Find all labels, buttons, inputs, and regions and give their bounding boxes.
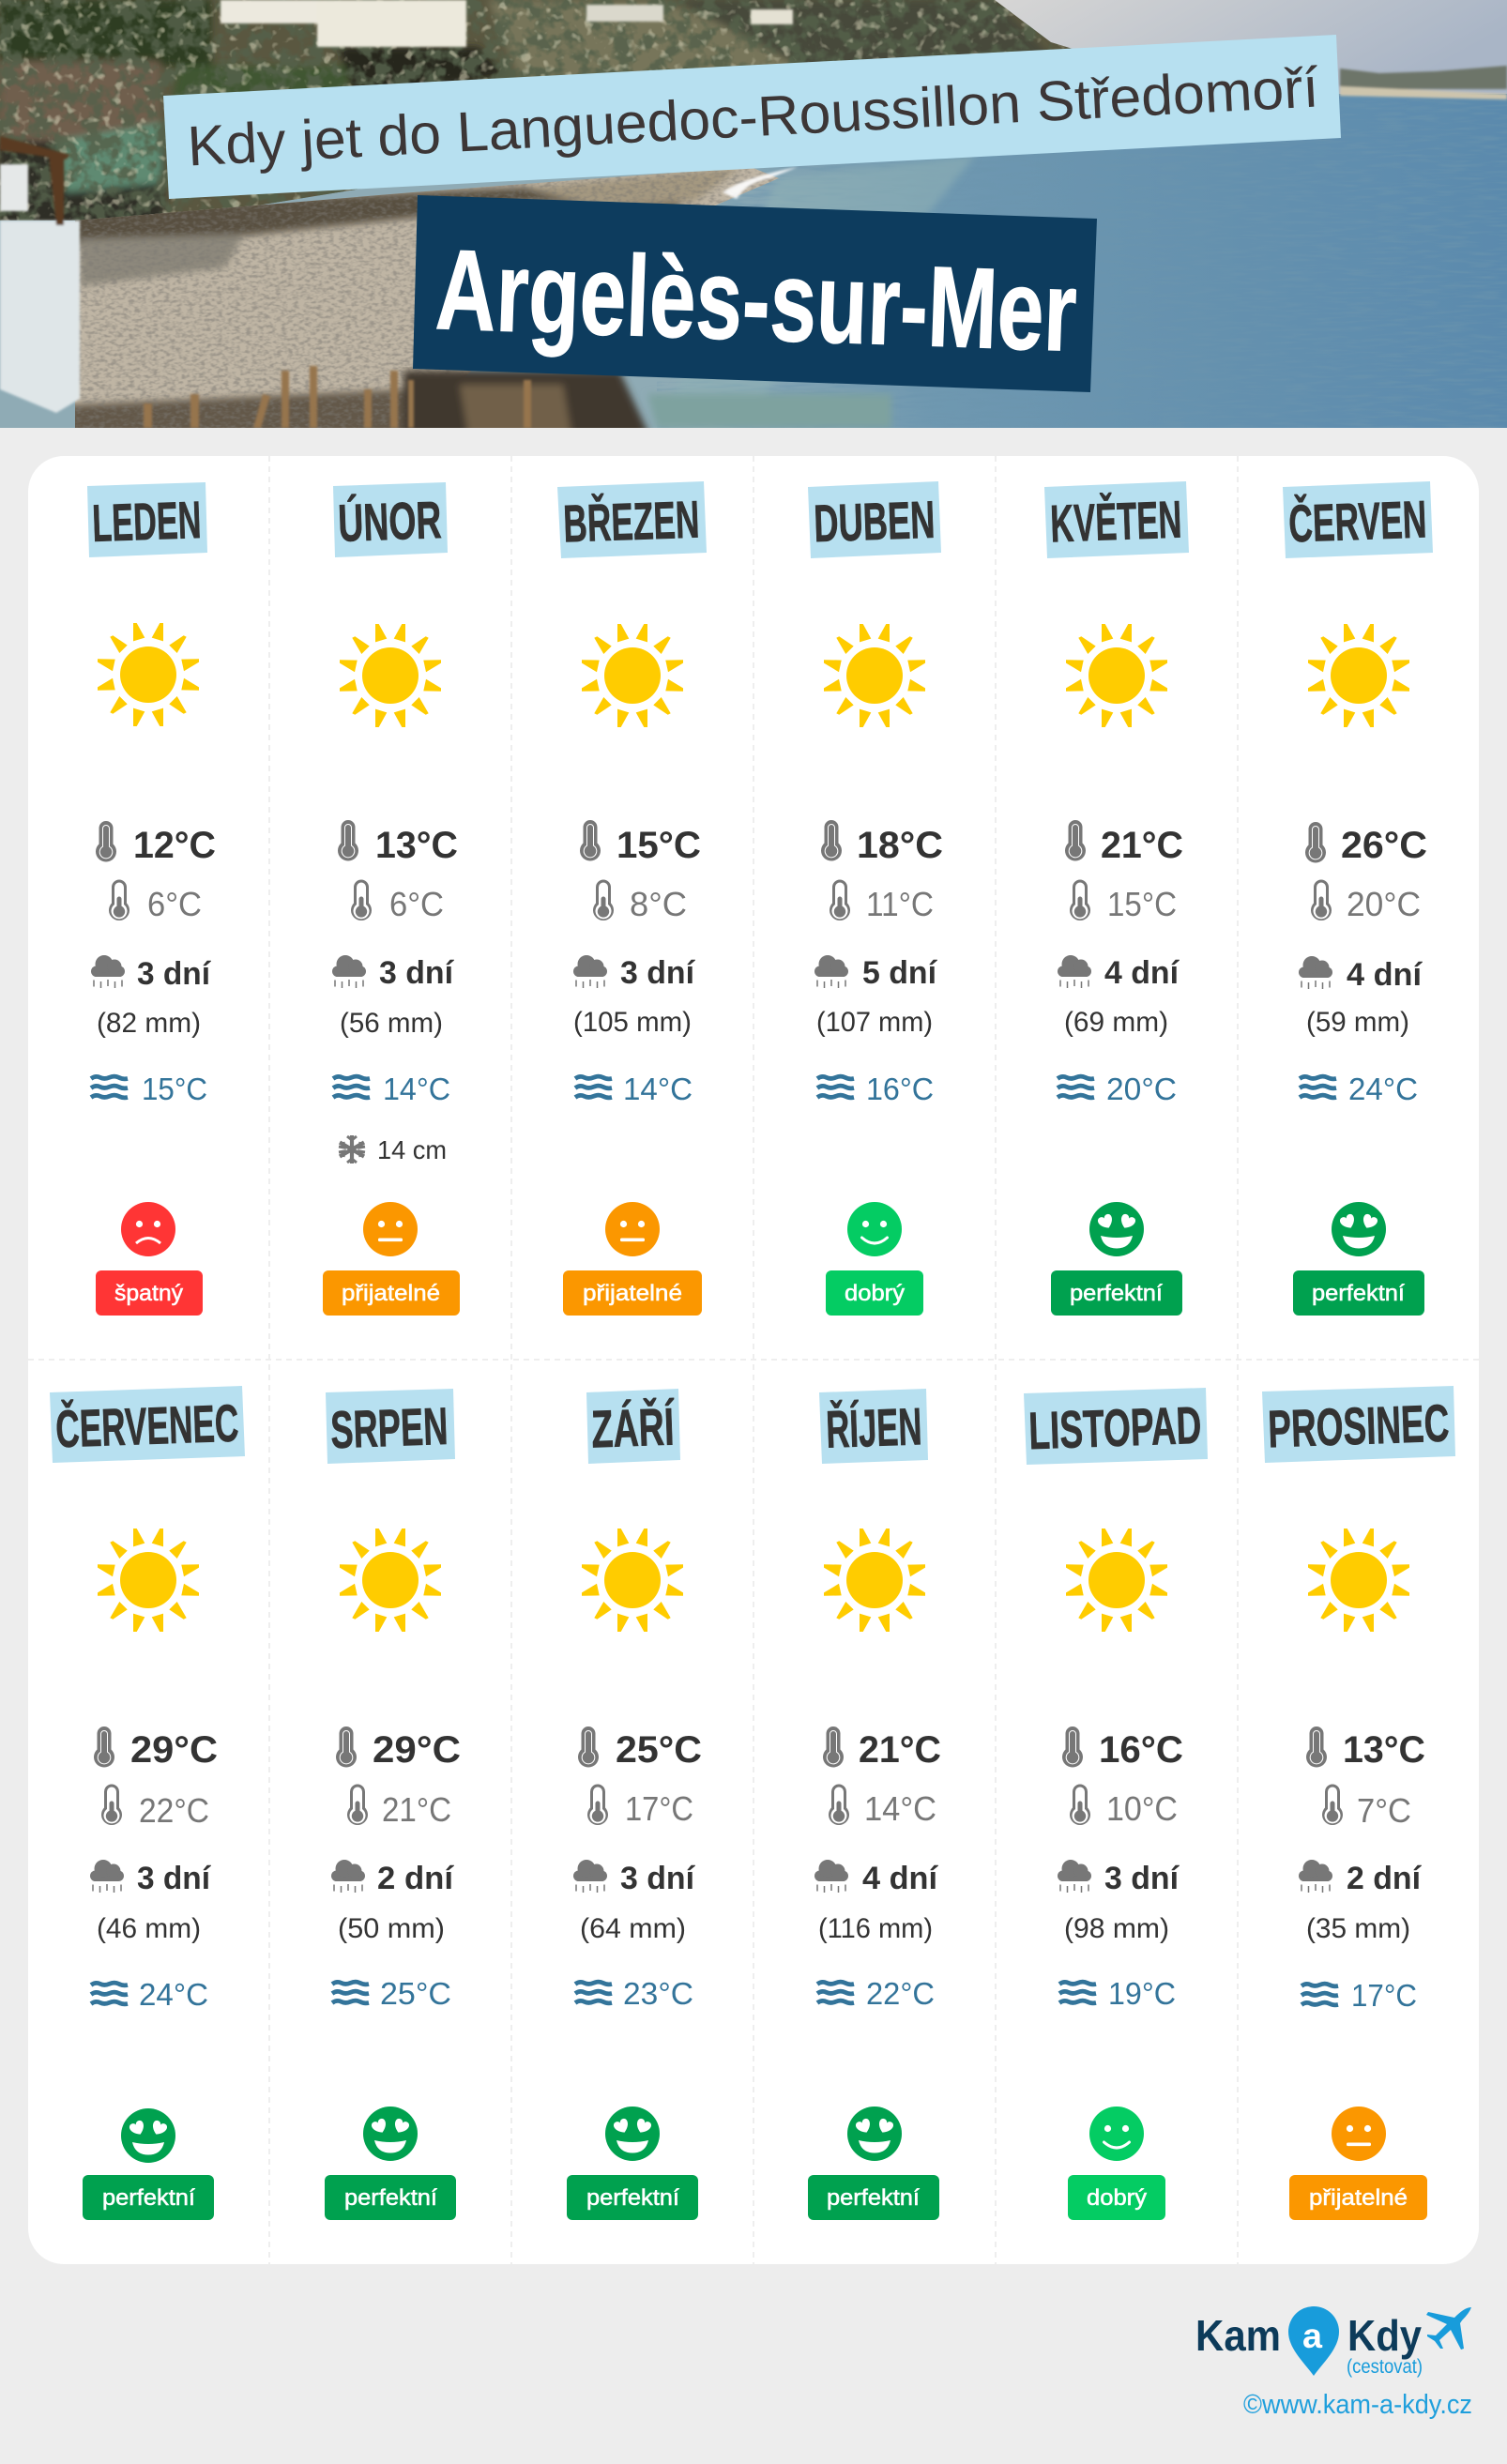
min temperature <box>1070 1785 1178 1828</box>
rain days: 3 dní <box>137 956 212 992</box>
title banner: town name <box>413 195 1097 392</box>
rating: good: dobrý <box>1087 2185 1147 2211</box>
rating: perfect: perfektní <box>1312 1281 1405 1306</box>
month: November <box>1024 1388 1208 2220</box>
max temperature: 29°C <box>373 1729 461 1771</box>
rain days <box>332 955 455 991</box>
min temperature: 7°C <box>1357 1791 1411 1830</box>
max temperature: 21°C <box>1101 825 1183 866</box>
month: June <box>1283 481 1433 1316</box>
precipitation: (50 mm) <box>338 1913 445 1944</box>
icon: sun <box>582 624 683 727</box>
max temperature <box>94 1726 218 1771</box>
website credit: ©www.kam-a-kdy.cz <box>1243 2390 1472 2420</box>
month label: LISTOPAD <box>1024 1388 1208 1465</box>
max temperature: 25°C <box>616 1729 702 1771</box>
month: March <box>557 481 707 1316</box>
max temperature: 26°C <box>1341 825 1427 866</box>
title banner: region: Kdy jet do Languedoc-Roussillon Středomoří <box>186 55 1320 178</box>
month: July <box>50 1386 245 2220</box>
rating: perfect: perfektní <box>586 2185 679 2211</box>
sea temperature <box>575 1976 693 2011</box>
rain days: 3 dní <box>379 955 455 991</box>
month label: ZÁŘÍ: ZÁŘÍ <box>590 1396 676 1459</box>
min temperature: 20°C <box>1347 885 1421 923</box>
min temperature: 21°C <box>382 1790 451 1829</box>
precipitation: (98 mm) <box>1064 1913 1169 1944</box>
sea temperature: 19°C <box>1108 1976 1176 2011</box>
sea temperature <box>91 1072 207 1106</box>
month: May <box>1044 481 1189 1316</box>
month: October <box>808 1389 941 2220</box>
rating: perfect: perfektní <box>1070 1281 1163 1306</box>
rating: perfect <box>1293 1202 1424 1316</box>
sea temperature <box>333 1072 450 1106</box>
brand logo: Kam a Kdy: Kam <box>1195 2311 1281 2360</box>
month label: BŘEZEN: BŘEZEN <box>562 490 700 554</box>
sea temperature: 16°C <box>866 1072 934 1106</box>
sea temperature <box>91 1977 208 2012</box>
icon: location pin: a <box>1302 2317 1322 2355</box>
rating: perfect: perfektní <box>102 2185 195 2211</box>
rating: perfect <box>1051 1202 1182 1316</box>
rain days: 3 dní <box>1104 1861 1180 1896</box>
rain days <box>1299 956 1423 993</box>
sea temperature: 17°C <box>1351 1978 1417 2013</box>
month label: ÚNOR <box>333 482 448 557</box>
rain days: 5 dní <box>862 955 938 991</box>
max temperature <box>96 821 216 866</box>
snow depth <box>339 1135 447 1164</box>
icon: sun <box>824 1529 925 1632</box>
min temperature: 17°C <box>625 1789 693 1828</box>
month label: ŘÍJEN: ŘÍJEN <box>825 1396 922 1459</box>
hillside <box>0 0 1126 225</box>
icon: sun <box>582 1529 683 1632</box>
month: January <box>87 482 216 1316</box>
brand logo: Kam a Kdy: (cestovat) <box>1347 2356 1423 2378</box>
icon: sun <box>340 1529 441 1632</box>
sea temperature <box>1058 1072 1177 1106</box>
sea temperature <box>817 1976 935 2011</box>
icon: snowflake <box>339 1135 365 1164</box>
snow depth: 14 cm <box>377 1135 447 1164</box>
min temperature <box>593 880 687 923</box>
month label: ČERVEN: ČERVEN <box>1287 489 1427 554</box>
max temperature: 21°C <box>859 1729 941 1771</box>
month label: KVĚTEN <box>1044 481 1189 558</box>
rating: good <box>826 1202 923 1316</box>
precipitation: (69 mm) <box>1064 1007 1168 1038</box>
min temperature: 6°C <box>389 885 444 923</box>
precipitation: (105 mm) <box>573 1007 692 1038</box>
rating: acceptable: přijatelné <box>342 1281 440 1306</box>
month label: LISTOPAD: LISTOPAD <box>1028 1395 1202 1460</box>
sea temperature: 24°C <box>1348 1072 1418 1106</box>
month: April <box>808 481 943 1316</box>
min temperature: 22°C <box>139 1791 209 1830</box>
rating: acceptable: přijatelné <box>1309 2185 1408 2211</box>
title banner: town name: Argelès-sur-Mer <box>434 225 1079 375</box>
rain days: 2 dní <box>377 1861 455 1896</box>
rating: bad: špatný <box>114 1281 183 1306</box>
max temperature: 18°C <box>857 825 943 866</box>
max temperature <box>821 820 943 866</box>
month label: ČERVENEC <box>50 1386 245 1463</box>
precipitation: (56 mm) <box>340 1008 443 1039</box>
sea temperature: 20°C <box>1106 1072 1177 1106</box>
sea temperature <box>817 1072 934 1106</box>
sea temperature <box>575 1072 693 1106</box>
rating: bad <box>96 1202 203 1316</box>
precipitation: (116 mm) <box>818 1913 933 1944</box>
brand logo: Kam a Kdy <box>1195 2306 1471 2378</box>
sea temperature: 22°C <box>866 1976 935 2011</box>
sea temperature: 15°C <box>142 1072 207 1106</box>
rain days: 4 dní <box>862 1861 939 1896</box>
rain days <box>1299 1860 1423 1896</box>
month label: ČERVENEC: ČERVENEC <box>54 1393 239 1458</box>
max temperature: 15°C <box>616 825 701 866</box>
precipitation: (64 mm) <box>580 1913 686 1944</box>
rain days: 4 dní <box>1347 957 1423 993</box>
rating: perfect <box>325 2107 456 2220</box>
month label: SRPEN: SRPEN <box>329 1396 449 1459</box>
month label: ZÁŘÍ <box>586 1389 680 1464</box>
precipitation: (107 mm) <box>816 1007 933 1038</box>
month label: ČERVEN <box>1283 481 1433 558</box>
precipitation: (82 mm) <box>97 1008 201 1039</box>
sea temperature <box>1300 1072 1418 1106</box>
month label: SRPEN <box>326 1389 455 1464</box>
max temperature <box>1065 820 1183 866</box>
rain days <box>573 955 696 991</box>
month: September <box>567 1389 702 2220</box>
max temperature <box>338 820 458 866</box>
sea temperature <box>1059 1976 1176 2011</box>
month label: LEDEN: LEDEN <box>91 490 202 553</box>
icon: sun <box>1066 624 1167 727</box>
sea temperature <box>1302 1978 1417 2013</box>
rain days: 3 dní <box>620 1861 696 1896</box>
month label: ÚNOR: ÚNOR <box>337 490 442 553</box>
rating: good <box>1068 2107 1165 2220</box>
icon: sun <box>1066 1529 1167 1632</box>
max temperature: 12°C <box>133 825 216 866</box>
max temperature <box>580 820 701 866</box>
icon: sun <box>98 623 199 726</box>
sea temperature: 14°C <box>623 1072 693 1106</box>
max temperature: 13°C <box>1343 1729 1425 1771</box>
rain days <box>1058 1860 1180 1896</box>
rain days <box>814 1860 939 1896</box>
beach <box>75 169 779 428</box>
rating: perfect: perfektní <box>344 2185 437 2211</box>
rating: acceptable <box>1289 2107 1427 2220</box>
rating: perfect <box>808 2107 939 2220</box>
month label: BŘEZEN <box>557 481 707 558</box>
min temperature <box>347 1785 451 1829</box>
rain days: 2 dní <box>1347 1861 1423 1896</box>
min temperature <box>109 880 202 923</box>
icon: sun <box>1308 1529 1409 1632</box>
month: February <box>323 482 460 1316</box>
month label: LEDEN <box>87 482 207 557</box>
max temperature <box>1306 1726 1425 1771</box>
sea temperature <box>332 1976 451 2011</box>
month label: ŘÍJEN <box>819 1389 928 1464</box>
icon: location pin <box>1288 2306 1339 2376</box>
max temperature <box>1305 822 1427 866</box>
rain days: 4 dní <box>1104 955 1180 991</box>
icon: sun <box>98 1529 199 1632</box>
sea temperature: 25°C <box>380 1976 451 2011</box>
rating: perfect <box>83 2108 214 2220</box>
weather card panel <box>28 456 1479 2264</box>
min temperature <box>1311 880 1421 923</box>
rain days <box>814 955 938 991</box>
month label: KVĚTEN: KVĚTEN <box>1049 490 1182 553</box>
min temperature <box>587 1785 693 1828</box>
sea temperature: 24°C <box>139 1977 208 2012</box>
rain days <box>1058 955 1180 991</box>
rain days: 3 dní <box>620 955 696 991</box>
min temperature: 15°C <box>1107 885 1177 923</box>
max temperature: 13°C <box>375 825 458 866</box>
rating: acceptable <box>323 1202 460 1316</box>
rating: acceptable: přijatelné <box>583 1281 682 1306</box>
sea temperature: 23°C <box>623 1976 693 2011</box>
max temperature <box>578 1726 702 1771</box>
min temperature <box>830 880 934 923</box>
precipitation: (59 mm) <box>1306 1007 1409 1038</box>
min temperature <box>829 1785 936 1828</box>
min temperature: 10°C <box>1106 1789 1178 1828</box>
icon: sun <box>1308 624 1409 727</box>
rating: good: dobrý <box>845 1281 905 1306</box>
min temperature <box>1070 880 1177 923</box>
sea temperature: 14°C <box>383 1072 450 1106</box>
icon: sun <box>340 624 441 727</box>
rain days: 3 dní <box>137 1861 212 1896</box>
rating: acceptable <box>563 1202 702 1316</box>
min temperature: 11°C <box>866 885 934 923</box>
min temperature <box>1322 1785 1411 1830</box>
month label: DUBEN <box>808 481 941 558</box>
month: August <box>325 1389 461 2220</box>
rating: perfect: perfektní <box>827 2185 920 2211</box>
month: December <box>1262 1386 1455 2220</box>
rain days <box>90 1860 212 1896</box>
rain days <box>91 955 212 992</box>
rain days <box>573 1860 696 1896</box>
hero photo: beach and sea <box>0 0 1507 441</box>
month label: DUBEN: DUBEN <box>813 490 936 553</box>
max temperature <box>336 1726 461 1771</box>
rating: perfect <box>567 2107 698 2220</box>
rain days <box>331 1860 455 1896</box>
min temperature: 14°C <box>864 1789 936 1828</box>
max temperature <box>1062 1726 1183 1771</box>
precipitation: (35 mm) <box>1306 1913 1410 1944</box>
min temperature: 6°C <box>147 885 202 923</box>
max temperature: 29°C <box>130 1729 218 1771</box>
min temperature: 8°C <box>630 885 687 923</box>
max temperature <box>823 1726 941 1771</box>
precipitation: (46 mm) <box>97 1913 201 1944</box>
icon: sun <box>824 624 925 727</box>
max temperature: 16°C <box>1099 1729 1183 1771</box>
icon: airplane <box>1426 2307 1471 2350</box>
brand logo: Kam a Kdy: Kdy <box>1347 2311 1422 2360</box>
min temperature <box>351 880 444 923</box>
min temperature <box>101 1785 209 1830</box>
